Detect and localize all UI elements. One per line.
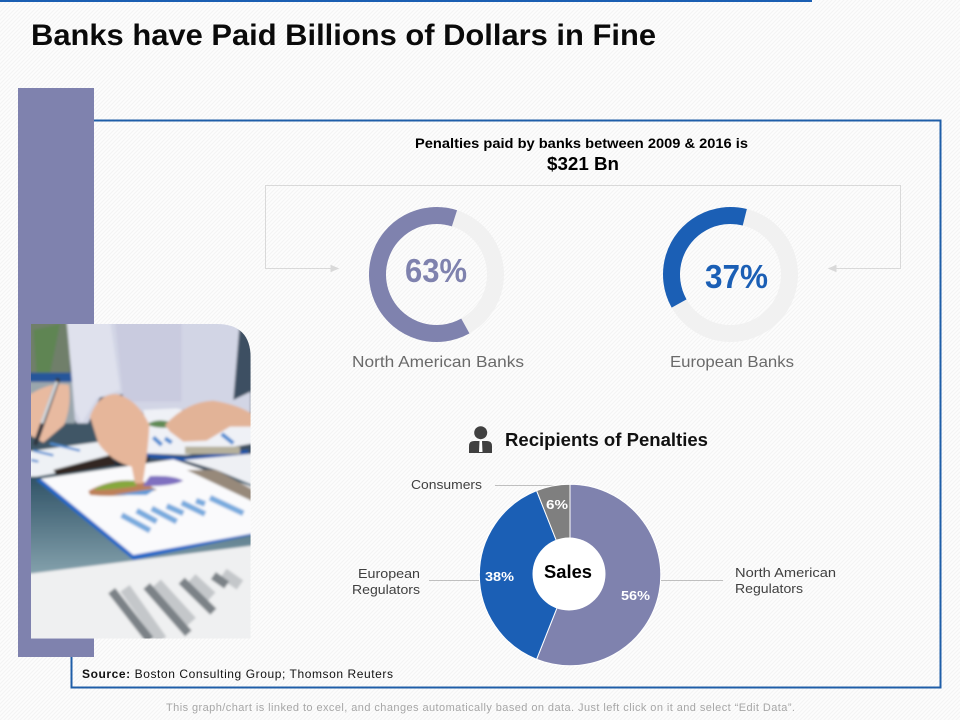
percentage labels — [485, 497, 650, 603]
donut: North American Banks 63% — [356, 194, 517, 355]
heading: penalties total — [415, 135, 748, 174]
slice: European Regulators 38% — [479, 491, 570, 659]
panel frame — [72, 120, 940, 688]
title: Banks have Paid Billions of Dollars in Fine — [31, 19, 656, 52]
donut: North American Banks 63%: 63% — [405, 252, 467, 289]
heading: penalties total: Penalties paid by banks between 2009 & 2016 is — [415, 135, 748, 151]
donut: European Banks 37% — [650, 194, 811, 355]
donut centre with Sales label: Sales — [544, 562, 592, 582]
label: Consumers: Consumers — [411, 477, 483, 492]
top accent bar — [0, 0, 812, 2]
source note: Source: Boston Consulting Group; Thomson Reuters — [82, 667, 393, 681]
percentage labels: 38% — [485, 569, 514, 584]
label: European Banks: European Banks — [670, 354, 794, 371]
slice: North American Regulators 56% — [537, 484, 661, 666]
donut centre with Sales label — [532, 538, 606, 610]
label: North American Banks: North American Banks — [352, 354, 524, 371]
donut: European Banks 37%: 37% — [705, 258, 768, 295]
label: North American Regulators: North American — [735, 565, 836, 580]
percentage labels: 56% — [621, 588, 650, 603]
purple side bar — [18, 88, 94, 657]
label: North American Regulators — [735, 565, 836, 596]
icon: person with tie — [469, 426, 492, 453]
label: North American Regulators: Regulators — [735, 581, 804, 596]
percentage labels: 6% — [546, 497, 569, 512]
donut chart: recipients — [479, 484, 661, 666]
footer note: This graph/chart is linked to excel, and changes automatically based on data. Just left click on it and select “Edit Data”. — [166, 702, 795, 714]
leader lines — [429, 486, 723, 580]
heading: Recipients of Penalties: Recipients of Penalties — [505, 430, 708, 450]
bracket connector with arrows — [266, 186, 900, 272]
label: European Regulators: Regulators — [352, 582, 421, 597]
slice: Consumers 6% — [537, 484, 570, 575]
label: European Regulators: European — [358, 566, 420, 581]
label: European Regulators — [352, 566, 421, 597]
photo: hands pointing at charts — [27, 320, 257, 643]
heading: penalties total: $321 Bn — [547, 154, 619, 174]
